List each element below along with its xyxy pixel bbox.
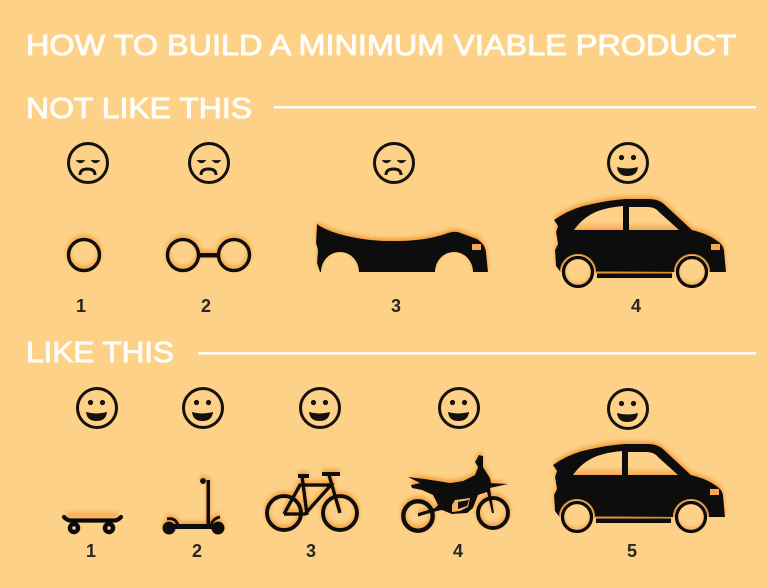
- icon: happy face 5: [608, 390, 648, 428]
- step numbers, top row: 1: [76, 296, 86, 316]
- icon: single wheel: [68, 240, 100, 270]
- step numbers, bottom row: [86, 541, 637, 561]
- step numbers, top row: 4: [631, 296, 641, 316]
- step numbers, bottom row: 1: [86, 541, 96, 561]
- icon: bicycle: [267, 474, 357, 530]
- icon: sad face 3: [374, 144, 414, 182]
- step numbers, bottom row: 3: [306, 541, 316, 561]
- icon: skateboard: [64, 512, 121, 532]
- title: HOW TO BUILD A MINIMUM VIABLE PRODUCT: [26, 30, 736, 62]
- icon: happy face 4: [608, 144, 648, 182]
- heading: not like this: NOT LIKE THIS: [26, 93, 252, 125]
- icon: happy face 3: [300, 388, 340, 428]
- step numbers, bottom row: 4: [453, 541, 463, 561]
- step numbers, top row: [76, 296, 641, 316]
- icon: complete car, step 4: [554, 199, 726, 286]
- step numbers, top row: 2: [201, 296, 211, 316]
- icon: motorbike: [403, 455, 508, 531]
- icon: scooter: [162, 478, 224, 534]
- icon: happy face 1: [78, 388, 116, 428]
- heading: like this: LIKE THIS: [26, 337, 174, 369]
- step numbers, bottom row: 2: [192, 541, 202, 561]
- icon: happy face 4: [440, 388, 478, 428]
- step numbers, top row: 3: [391, 296, 401, 316]
- icon: happy face 2: [184, 388, 222, 428]
- icon: two wheels on axle: [168, 240, 250, 270]
- step numbers, bottom row: 5: [627, 541, 637, 561]
- icon: sad face 2: [190, 144, 228, 182]
- icon: sad face 1: [68, 144, 108, 182]
- icon: car body shell: [316, 224, 488, 272]
- icon: complete car, step 5: [553, 444, 725, 532]
